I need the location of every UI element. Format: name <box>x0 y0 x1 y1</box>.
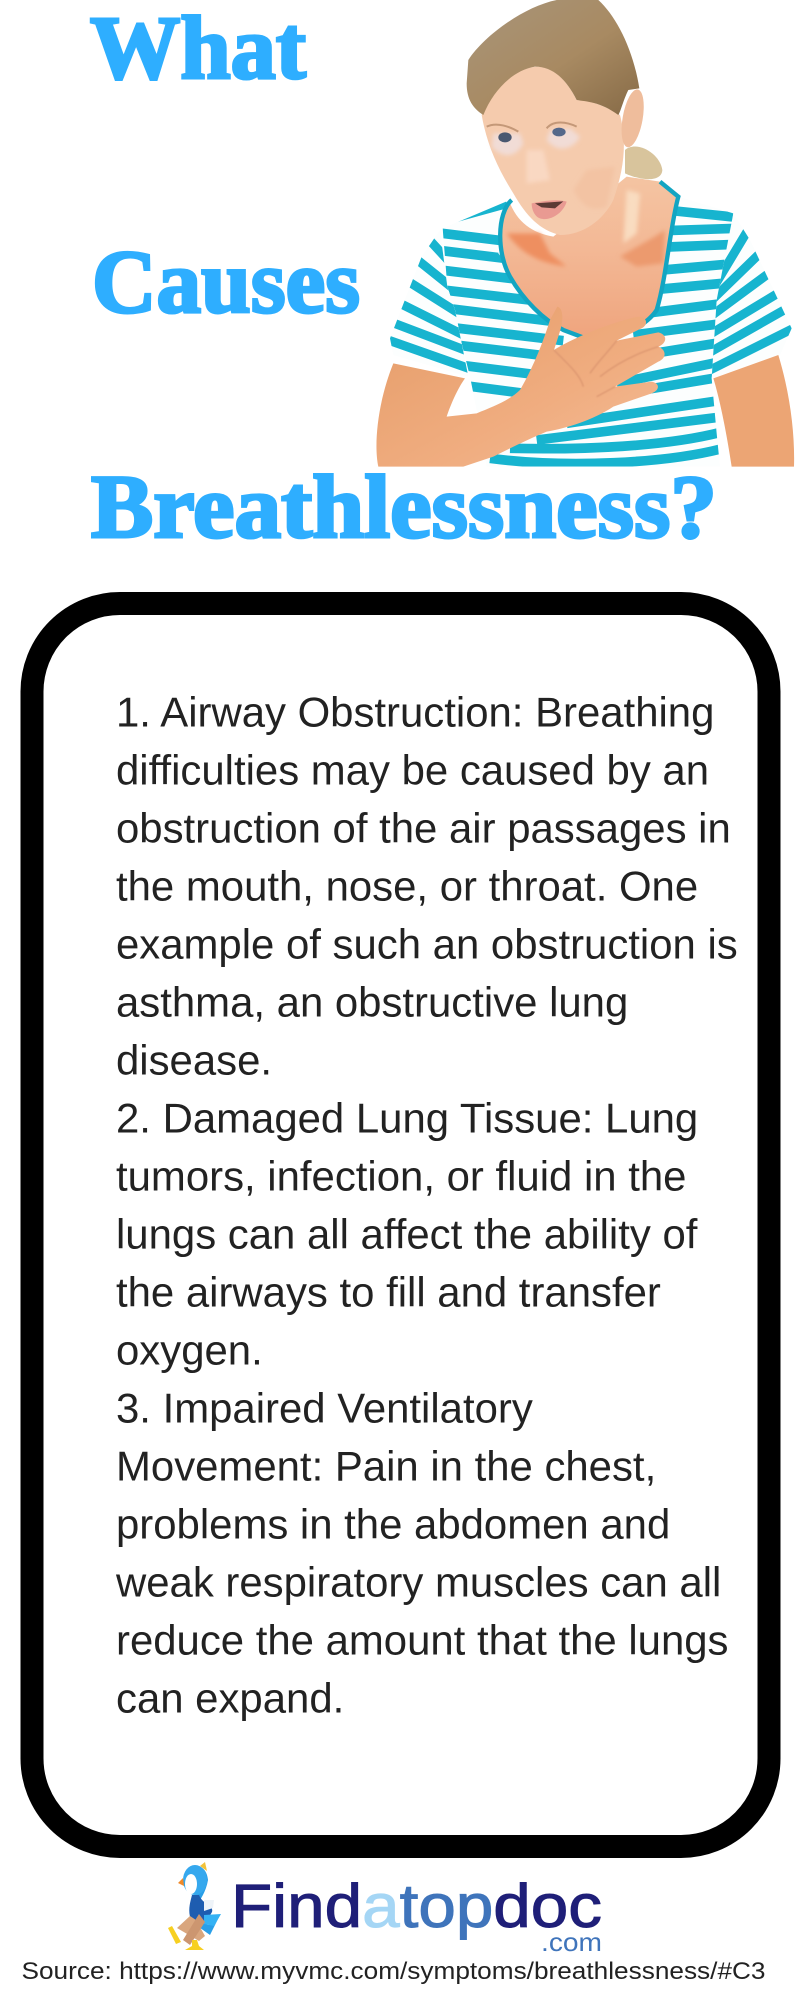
shirt torso <box>442 202 734 467</box>
panel text: 1. Airway Obstruction: Breathing <box>116 688 714 736</box>
panel text: oxygen. <box>116 1326 263 1374</box>
left sleeve <box>390 238 468 373</box>
right sleeve <box>712 214 792 378</box>
panel text: problems in the abdomen and <box>116 1500 670 1548</box>
panel text: obstruction of the air passages in <box>116 804 731 852</box>
panel text: can expand. <box>116 1674 344 1722</box>
ponytail <box>625 147 662 179</box>
hair <box>467 0 639 115</box>
panel text: the airways to fill and transfer <box>116 1268 661 1316</box>
panel text: tumors, infection, or fluid in the <box>116 1152 686 1200</box>
icon: bird mascot with bandage <box>168 1862 221 1950</box>
shirt neckline trim <box>500 182 678 340</box>
title: What: What <box>90 0 306 98</box>
chest and neck <box>500 177 678 340</box>
panel text: difficulties may be caused by an <box>116 746 709 794</box>
panel text: lungs can all affect the ability of <box>116 1210 698 1258</box>
finger creases <box>554 341 658 397</box>
photo: woman holding chest, short of breath <box>376 0 800 470</box>
title: Causes: Causes <box>92 233 360 332</box>
panel text: 3. Impaired Ventilatory <box>116 1384 533 1432</box>
panel text: weak respiratory muscles can all <box>115 1558 721 1606</box>
panel text: Movement: Pain in the chest, <box>116 1442 656 1490</box>
text panel with black rounded border <box>32 604 769 1846</box>
panel text: 2. Damaged Lung Tissue: Lung <box>116 1094 698 1142</box>
panel text: disease. <box>116 1036 272 1084</box>
ear <box>618 88 648 149</box>
panel text <box>115 688 738 1722</box>
face <box>482 67 624 235</box>
panel text: the mouth, nose, or throat. One <box>116 862 698 910</box>
logo: Findatopdoc wordmark: .com <box>541 1927 602 1957</box>
source line: Source: https://www.myvmc.com/symptoms/breathlessness/#C3 <box>22 1958 766 1985</box>
panel text: example of such an obstruction is <box>116 920 738 968</box>
left arm and hand <box>376 307 665 467</box>
title: Breathlessness?: Breathlessness? <box>91 458 717 557</box>
panel text: asthma, an obstructive lung <box>116 978 628 1026</box>
right arm <box>713 355 794 467</box>
panel text: reduce the amount that the lungs <box>116 1616 728 1664</box>
facial features <box>487 122 615 219</box>
logo: Findatopdoc wordmark: Findatopdoc <box>231 1872 602 1940</box>
